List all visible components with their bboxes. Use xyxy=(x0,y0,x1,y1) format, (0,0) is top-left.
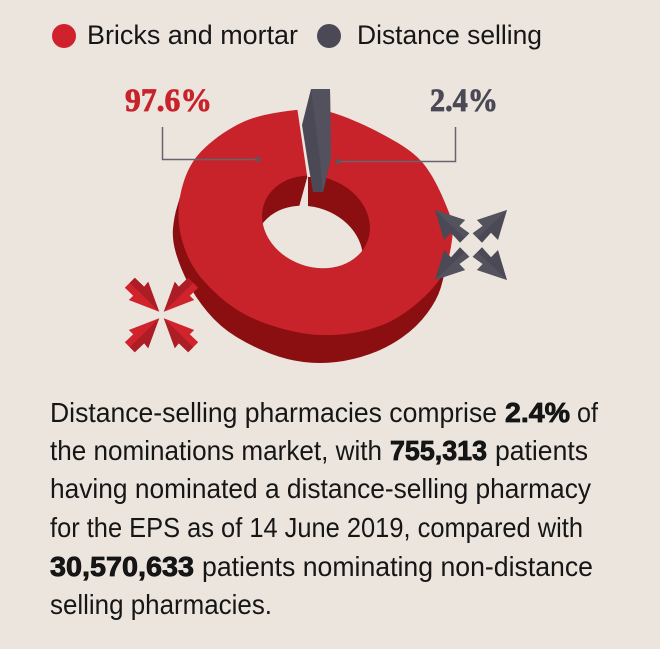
wedge gap xyxy=(296,100,330,208)
value: 2.4%: 2.4% xyxy=(430,83,498,119)
body text: patients nominating non-distance xyxy=(202,551,593,582)
body text: patients xyxy=(495,435,588,466)
body text: having nominated a distance-selling pharmacy xyxy=(50,473,591,504)
value: 97.6%: 97.6% xyxy=(125,83,212,119)
hole opening xyxy=(262,206,362,268)
body text: for the EPS as of 14 June 2019, compared with xyxy=(50,512,583,543)
icon: grey arrows outward xyxy=(435,210,507,280)
leader line: 2.4% xyxy=(338,127,456,162)
body text: the nominations market, with xyxy=(50,435,382,466)
legend label: distance selling: Distance selling xyxy=(357,20,542,50)
body text xyxy=(50,397,598,620)
body text: selling pharmacies. xyxy=(50,589,272,620)
donut chart xyxy=(173,89,453,363)
legend label: bricks and mortar: Bricks and mortar xyxy=(87,20,298,50)
body text: 30,570,633 xyxy=(50,551,194,582)
icon: red arrows inward xyxy=(125,278,198,352)
legend marker: bricks and mortar xyxy=(52,24,76,48)
body text: 755,313 xyxy=(390,435,487,466)
callout: 97.6% xyxy=(125,83,260,162)
body text: 2.4% xyxy=(505,397,570,428)
distance selling slice xyxy=(302,89,331,192)
body text: of xyxy=(577,397,598,428)
donut side wall xyxy=(173,197,448,363)
legend xyxy=(52,20,542,50)
callout: 2.4% xyxy=(336,83,498,164)
leader line: 97.6% xyxy=(162,127,258,160)
legend marker: distance selling xyxy=(317,24,341,48)
inner wall xyxy=(249,161,383,283)
donut top: bricks and mortar xyxy=(178,109,453,335)
body text: Distance-selling pharmacies comprise xyxy=(50,397,497,428)
